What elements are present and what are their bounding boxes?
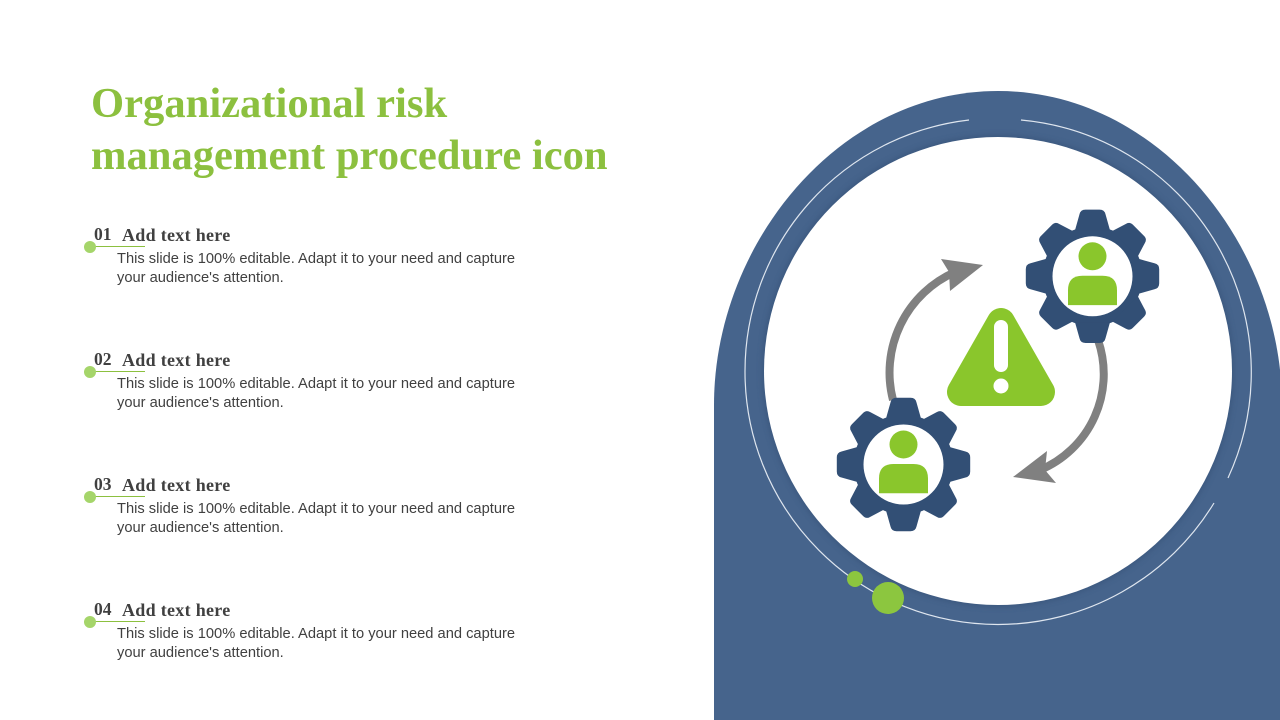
title: [91, 80, 608, 179]
list item 03: your audience's attention.: [117, 520, 284, 536]
list item 04: 04: [94, 599, 112, 619]
list item 03: This slide is 100% editable. Adapt it to your need and capture: [117, 501, 515, 517]
thin ring arcs: [745, 120, 1251, 624]
list item 01: [84, 224, 515, 286]
list item 03: Add text here: [122, 475, 231, 495]
icon: gear with person, bottom left: [837, 398, 970, 531]
list item 02: Add text here: [122, 350, 231, 370]
list item 02: 02: [94, 349, 112, 369]
list item 03: [84, 474, 515, 536]
arrow: upward curved: [890, 259, 983, 400]
list item 02: [84, 349, 515, 410]
list item 01: 01: [94, 224, 112, 244]
blue arch background: [714, 91, 1280, 720]
list item 01: This slide is 100% editable. Adapt it to your need and capture: [117, 251, 515, 267]
icon: warning triangle: [961, 320, 1041, 394]
icon: gear with person, top right: [1026, 210, 1159, 343]
white circle with shadow: [762, 135, 1234, 607]
title: Organizational risk: [91, 80, 447, 127]
list item 03: 03: [94, 474, 112, 494]
list item 01: your audience's attention.: [117, 270, 284, 286]
title: management procedure icon: [91, 132, 608, 179]
list item 01: Add text here: [122, 225, 231, 245]
list item 04: Add text here: [122, 600, 231, 620]
arrow: downward curved: [1013, 340, 1104, 483]
list item 04: This slide is 100% editable. Adapt it to your need and capture: [117, 626, 515, 642]
large green dot: [872, 582, 904, 614]
small green dot: [847, 571, 863, 587]
list item 04: [84, 599, 515, 660]
list item 02: This slide is 100% editable. Adapt it to your need and capture: [117, 376, 515, 392]
list item 02: your audience's attention.: [117, 394, 284, 410]
list item 04: your audience's attention.: [117, 644, 284, 660]
